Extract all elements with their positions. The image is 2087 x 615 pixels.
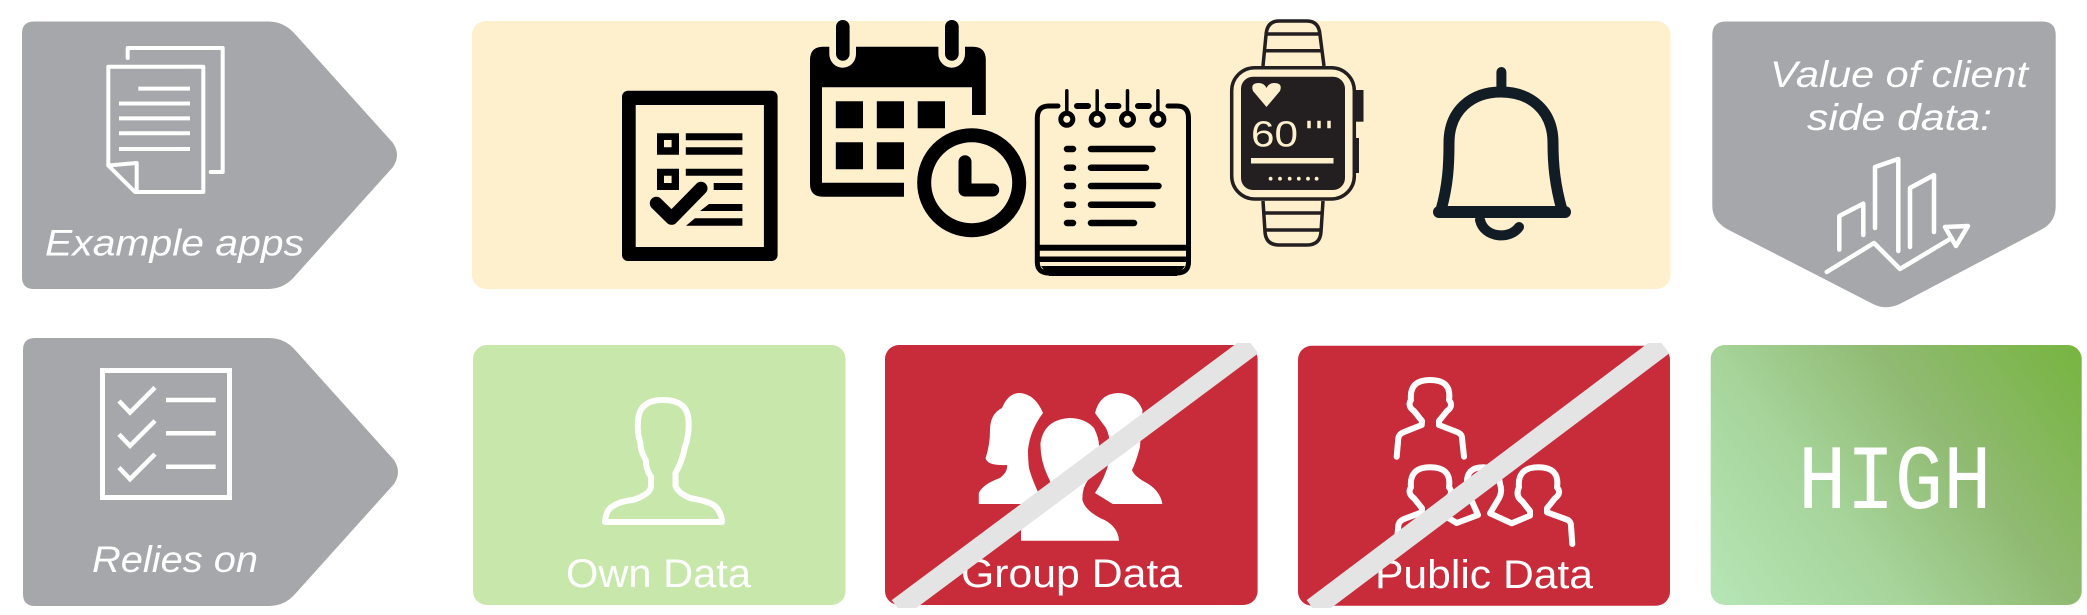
icon: notepad (1037, 91, 1189, 276)
panel: high value (1711, 345, 2082, 605)
panel: group data (885, 345, 1258, 608)
icon: crowd outlines (1397, 380, 1572, 544)
label: side data: side data: (1807, 97, 1992, 138)
panel: example apps tag (22, 22, 397, 289)
icon: person outline (605, 400, 722, 522)
label: group data: Group Data (961, 552, 1183, 596)
strike-through bar (898, 345, 1252, 608)
card background (473, 345, 846, 605)
icon: bell (1439, 72, 1565, 235)
icon: smart watch (1232, 21, 1364, 245)
panel: public data (1298, 345, 1670, 608)
label: relies on: Relies on (92, 539, 258, 580)
icon: rising chart (1827, 159, 1968, 272)
label: example apps: Example apps (45, 223, 304, 264)
card background (1711, 345, 2082, 605)
panel: value of client side data tag (1712, 22, 2056, 307)
tag shape (22, 22, 397, 289)
tag shape (23, 338, 398, 606)
panel: example apps icons (472, 20, 1670, 289)
card background (1298, 346, 1670, 606)
watch reading: 60 (1251, 114, 1298, 155)
icon: group silhouettes (979, 393, 1162, 541)
panel: relies on tag (23, 338, 398, 606)
panel background (472, 21, 1670, 289)
panel: own data (473, 345, 846, 605)
label: public data: Public Data (1375, 553, 1594, 597)
icon: checklist (102, 370, 230, 498)
label: value of client: Value of client (1770, 54, 2030, 95)
tag shape (1712, 22, 2056, 307)
label: high: HIGH (1798, 431, 1992, 536)
icon: documents (108, 48, 223, 192)
card background (885, 345, 1258, 605)
icon: checklist form (622, 91, 778, 261)
icon: calendar with clock (810, 20, 1019, 230)
label: own data: Own Data (566, 552, 752, 596)
strike-through bar (1313, 345, 1663, 608)
